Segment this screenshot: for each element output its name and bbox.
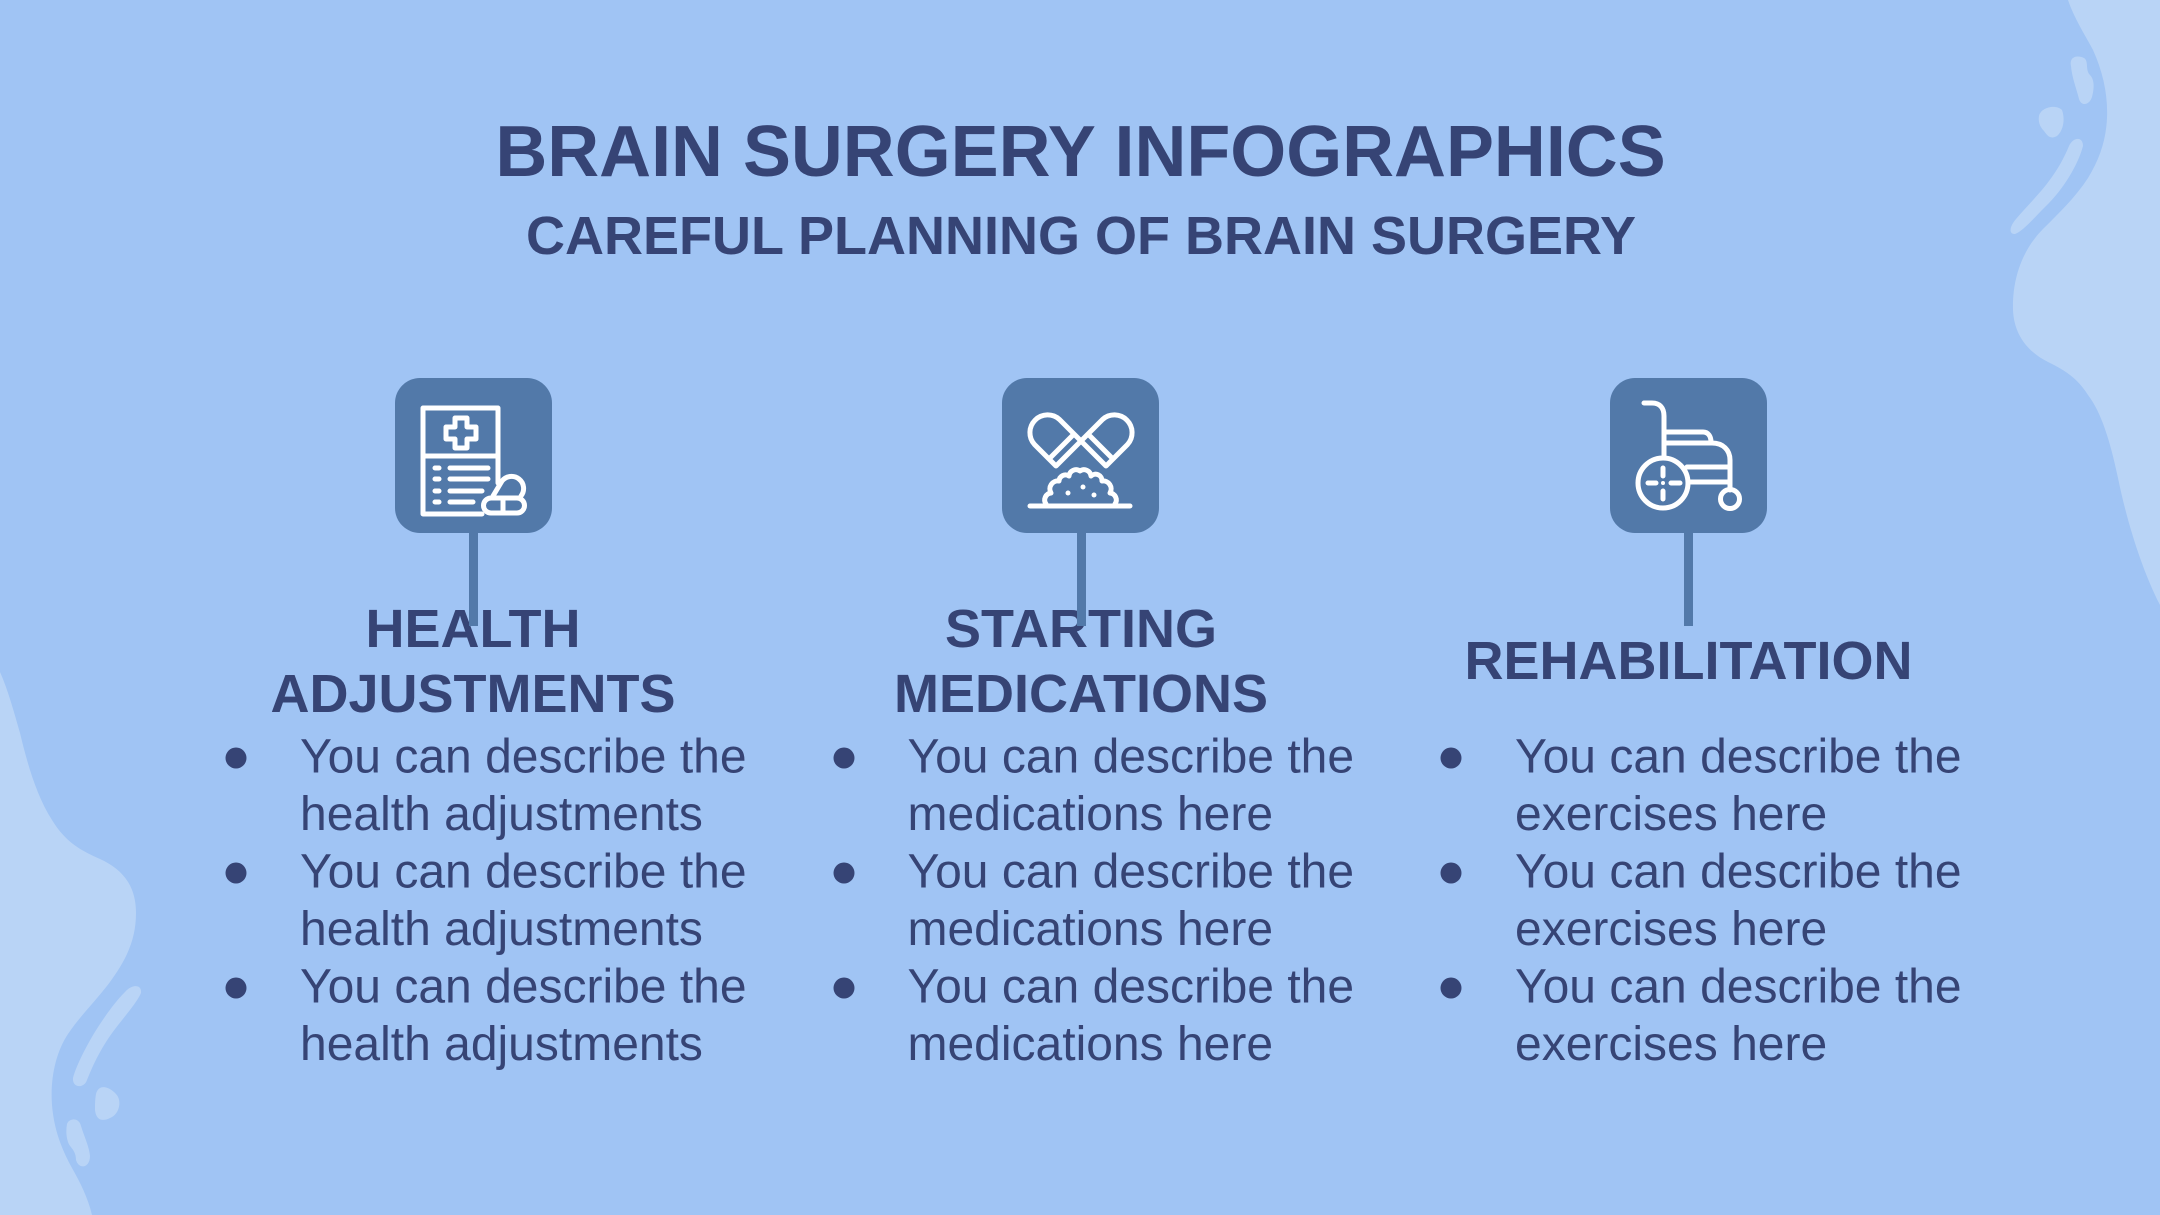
connector xyxy=(1077,533,1086,626)
title: BRAIN SURGERY INFOGRAPHICS xyxy=(495,112,1666,192)
heading: MEDICATIONS xyxy=(894,664,1268,724)
bullet list: health adjustments xyxy=(300,903,703,956)
bullet list xyxy=(1440,730,1962,1071)
bullet list xyxy=(834,730,1354,1071)
bullet list: exercises here xyxy=(1515,1018,1827,1071)
icon: wheelchair xyxy=(1610,378,1767,533)
column 3: rehabilitation xyxy=(1440,378,1962,1071)
bullet list: health adjustments xyxy=(300,788,703,841)
bullet list: medications here xyxy=(908,903,1273,956)
bullet list xyxy=(226,730,747,1071)
bullet list: You can describe the xyxy=(1515,960,1962,1014)
bullet list: health adjustments xyxy=(300,1018,703,1071)
column 1: health adjustments xyxy=(226,378,747,1071)
heading: REHABILITATION xyxy=(1465,631,1912,691)
bullet list: exercises here xyxy=(1515,788,1827,841)
column 2: starting medications xyxy=(834,378,1354,1071)
heading: ADJUSTMENTS xyxy=(270,664,676,724)
decorative blob: bottom left xyxy=(0,672,141,1215)
connector xyxy=(469,533,478,626)
bullet list: You can describe the xyxy=(908,846,1354,898)
heading: STARTING xyxy=(945,599,1217,659)
icon: medical report and pills xyxy=(395,378,552,533)
icon: capsules and powder xyxy=(1002,378,1159,533)
bullet list: medications here xyxy=(908,1018,1273,1071)
heading: HEALTH xyxy=(366,599,580,659)
bullet list: You can describe the xyxy=(908,730,1354,784)
decorative blob: top right xyxy=(2011,0,2160,605)
bullet list: exercises here xyxy=(1515,903,1827,956)
connector xyxy=(1684,533,1693,626)
bullet list: medications here xyxy=(908,788,1273,841)
bullet list: You can describe the xyxy=(1515,730,1962,784)
bullet list: You can describe the xyxy=(1515,846,1962,898)
bullet list: You can describe the xyxy=(300,846,747,898)
bullet list: You can describe the xyxy=(908,960,1354,1014)
bullet list: You can describe the xyxy=(300,730,747,784)
bullet list: You can describe the xyxy=(300,960,747,1014)
subtitle: CAREFUL PLANNING OF BRAIN SURGERY xyxy=(526,206,1636,266)
